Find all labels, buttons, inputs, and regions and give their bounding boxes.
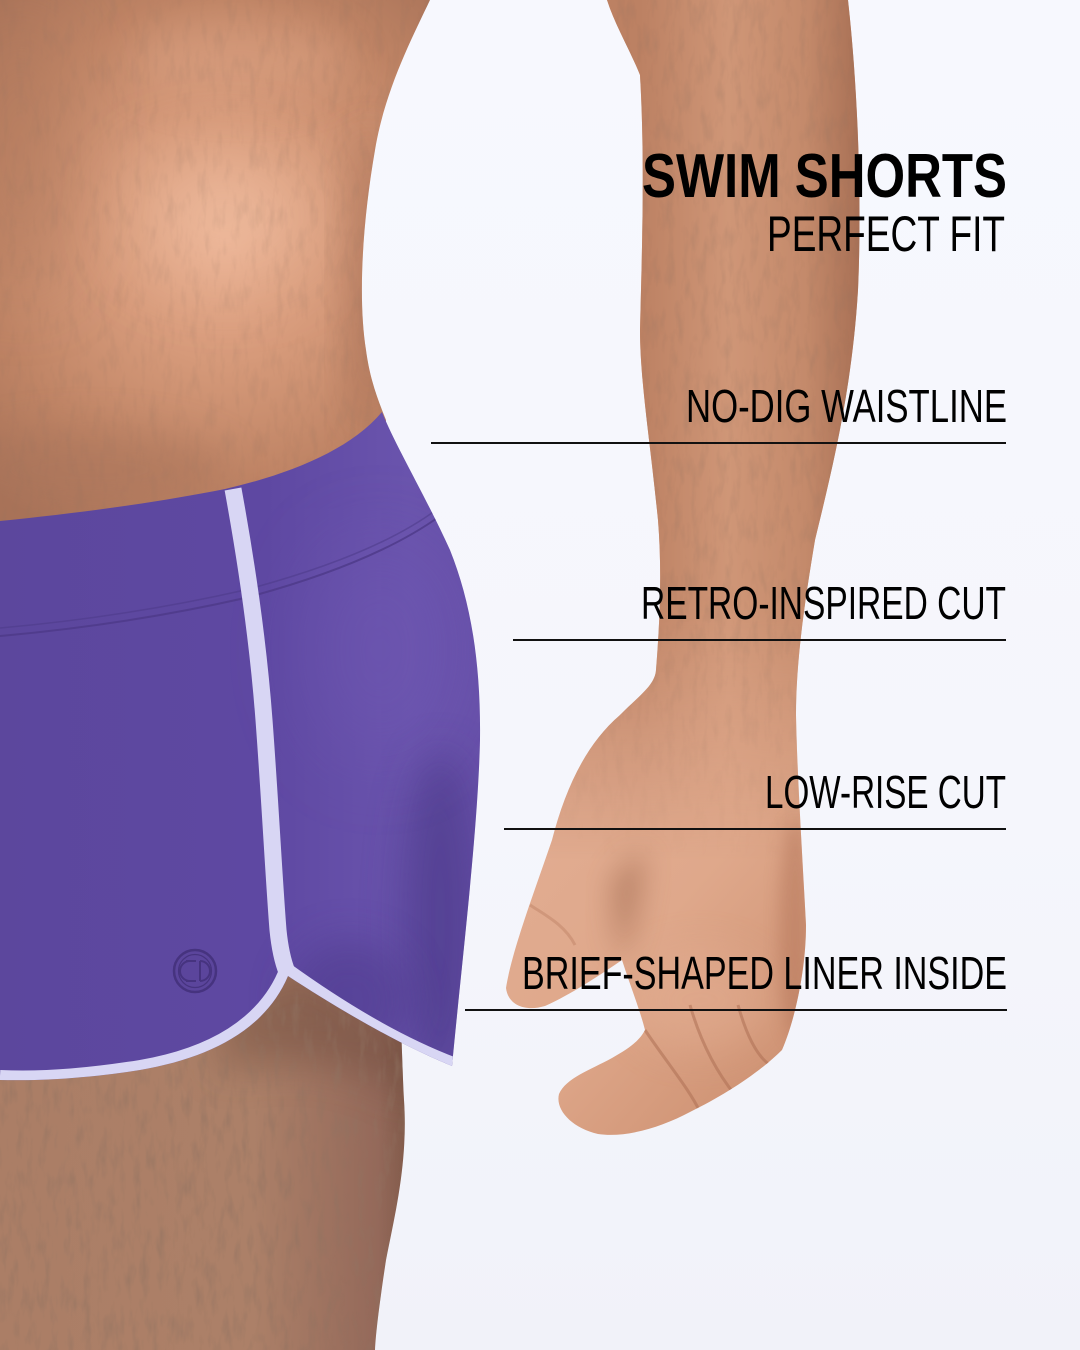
- icon: shorts logo badge: [174, 950, 216, 992]
- waistband stitching: [0, 516, 440, 636]
- thumb web shadow: [612, 850, 645, 960]
- photo: purple swim shorts: [0, 400, 490, 1100]
- heading: swim shorts: SWIM SHORTS: [642, 142, 1007, 211]
- photo: arm and hand: [500, 0, 870, 1140]
- subheading: perfect fit: PERFECT FIT: [767, 206, 1005, 262]
- photo: torso: [0, 0, 440, 560]
- title: [642, 142, 1007, 262]
- white piping side seam: [233, 489, 287, 972]
- finger creases: [645, 1005, 770, 1112]
- photo: leg: [0, 960, 420, 1350]
